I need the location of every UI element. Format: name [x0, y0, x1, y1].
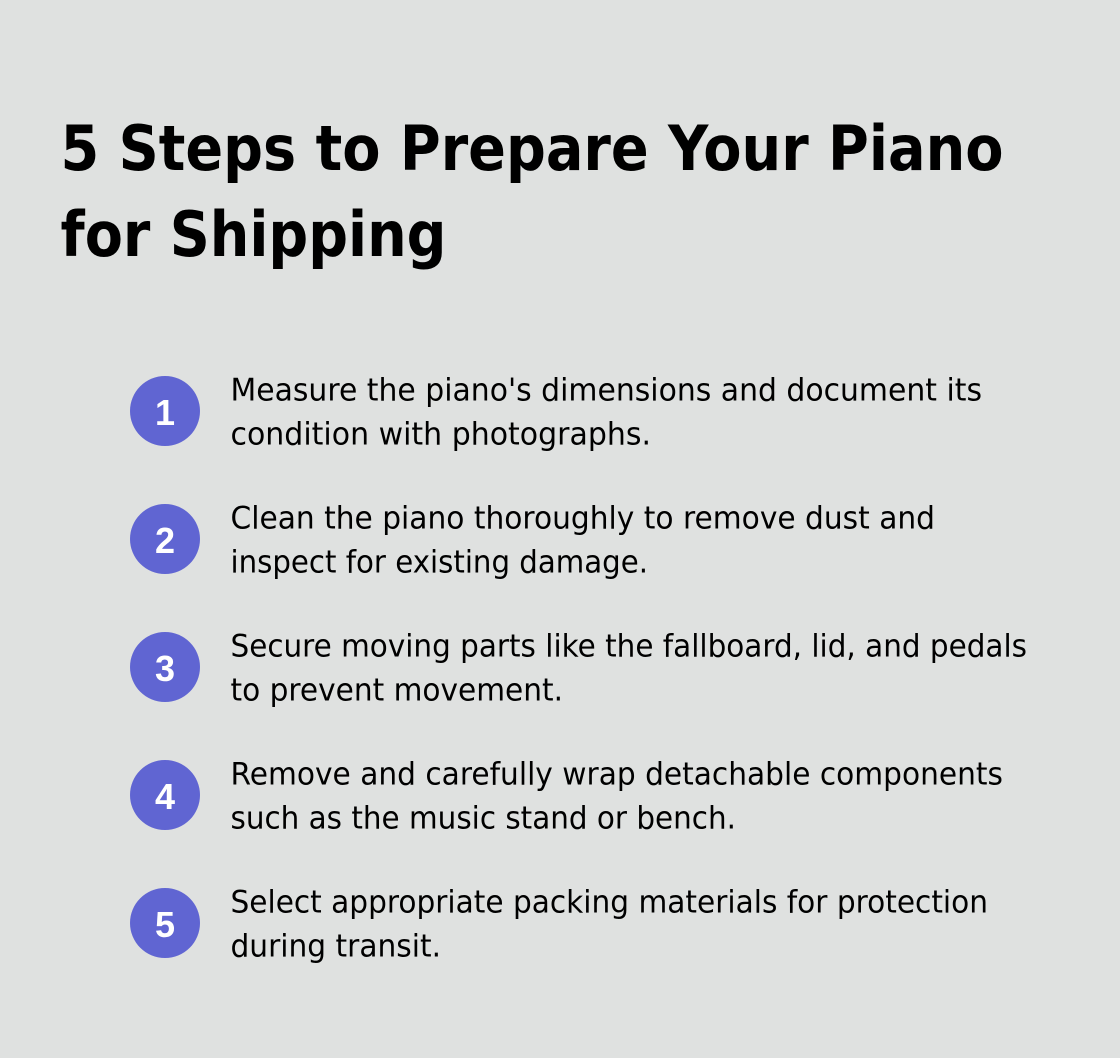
step 1 text [230, 372, 982, 452]
step 3 text [230, 628, 1027, 708]
title: 5 Steps to Prepare Your Piano [60, 112, 1004, 185]
step 4 [130, 756, 1003, 836]
title: for Shipping [60, 198, 446, 271]
step 5 text: Select appropriate packing materials for protection [230, 884, 988, 920]
step 2 number badge [130, 504, 200, 574]
step 1 text: condition with photographs. [230, 416, 651, 452]
step 5 text: during transit. [230, 928, 441, 964]
step 1 number badge: 1 [155, 392, 175, 433]
step 1 [130, 372, 982, 452]
title [60, 112, 1004, 271]
step 4 text [230, 756, 1003, 836]
step 2 number badge: 2 [155, 520, 175, 561]
step 2 text [230, 500, 935, 580]
step 4 number badge [130, 760, 200, 830]
step 4 text: Remove and carefully wrap detachable components [230, 756, 1003, 792]
step 1 number badge [130, 376, 200, 446]
step 1 text: Measure the piano's dimensions and document its [230, 372, 982, 408]
step 3 [130, 628, 1027, 708]
step 2 text: inspect for existing damage. [230, 544, 648, 580]
step 3 text: Secure moving parts like the fallboard, lid, and pedals [230, 628, 1027, 664]
step 3 number badge [130, 632, 200, 702]
step 2 text: Clean the piano thoroughly to remove dust and [230, 500, 935, 536]
step 4 number badge: 4 [155, 776, 175, 817]
step 5 number badge: 5 [155, 904, 175, 945]
step 3 text: to prevent movement. [230, 672, 563, 708]
step 3 number badge: 3 [155, 648, 175, 689]
step 5 [130, 884, 988, 964]
step 5 number badge [130, 888, 200, 958]
step 2 [130, 500, 935, 580]
step 4 text: such as the music stand or bench. [230, 800, 736, 836]
step 5 text [230, 884, 988, 964]
